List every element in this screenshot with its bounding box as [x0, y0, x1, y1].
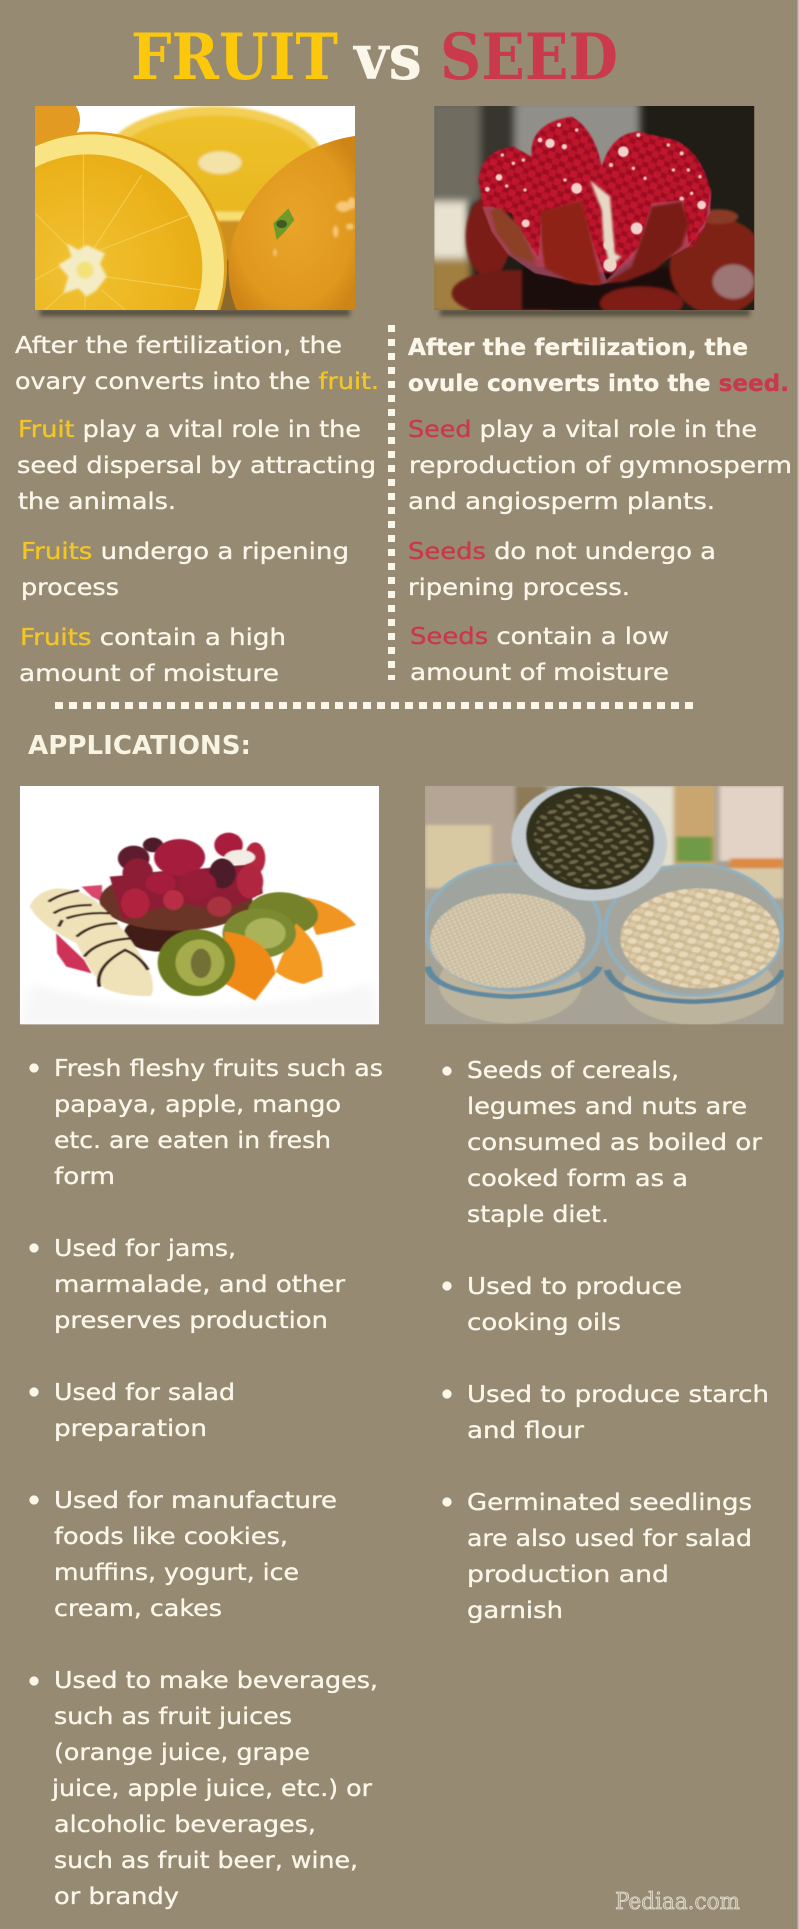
- title: vs: [352, 20, 422, 95]
- item: cooking oils: cooking oils: [467, 1308, 621, 1336]
- item: beverages: Used to make beverages,: [54, 1666, 378, 1694]
- fact: fruit formation: After the fertilization, the: [15, 331, 342, 359]
- fact: seed moisture: amount of moisture: [410, 658, 669, 686]
- item: beverages: [30, 1666, 378, 1910]
- tilted jar: [510, 786, 668, 902]
- item: fresh fruits: [30, 1054, 383, 1190]
- panel: fruit facts: [15, 331, 379, 687]
- item: cooking oils: [442, 1272, 682, 1336]
- item: salad: preparation: [54, 1414, 207, 1442]
- muffin: [123, 924, 188, 952]
- item: manufactured foods: foods like cookies,: [54, 1522, 288, 1550]
- item: staple diet: legumes and nuts are: [467, 1092, 747, 1120]
- berries: [118, 833, 265, 918]
- photo: pomegranate: [428, 100, 767, 320]
- item: manufactured foods: [30, 1486, 337, 1622]
- item: germinated seedlings: [442, 1488, 752, 1624]
- fact: seed role: [408, 415, 792, 515]
- list: seed applications: [442, 1056, 769, 1624]
- item: germinated seedlings: Germinated seedlings: [467, 1488, 752, 1516]
- list: fruit applications: [30, 1054, 383, 1910]
- fact: fruit role: the animals.: [18, 487, 176, 515]
- fact: fruit role: seed dispersal by attracting: [17, 451, 376, 479]
- item: salad: [30, 1378, 235, 1442]
- fact: seed role: and angiosperm plants.: [408, 487, 715, 515]
- heading: applications: APPLICATIONS:: [28, 731, 251, 761]
- title: [131, 20, 618, 95]
- item: starch and flour: and flour: [467, 1416, 584, 1444]
- item: salad: Used for salad: [54, 1378, 235, 1406]
- item: germinated seedlings: garnish: [467, 1596, 563, 1624]
- item: fresh fruits: Fresh fleshy fruits such as: [54, 1054, 383, 1082]
- photo: fruit dessert plate: [20, 786, 380, 1027]
- item: beverages: such as fruit beer, wine,: [54, 1846, 358, 1874]
- item: beverages: juice, apple juice, etc.) or: [51, 1774, 372, 1802]
- item: staple diet: Seeds of cereals,: [467, 1056, 679, 1084]
- fact: seed ripening: Seeds do not undergo a: [408, 537, 716, 565]
- item: germinated seedlings: production and: [467, 1560, 669, 1588]
- arils: [478, 117, 711, 273]
- banana: [30, 888, 153, 996]
- item: fresh fruits: form: [54, 1162, 115, 1190]
- fact: fruit ripening: process: [21, 573, 119, 601]
- rind: [482, 187, 711, 285]
- fact: fruit moisture: amount of moisture: [19, 659, 279, 687]
- item: cooking oils: Used to produce: [467, 1272, 682, 1300]
- item: staple diet: [442, 1056, 762, 1228]
- fact: seed formation: After the fertilization, the: [408, 333, 748, 361]
- item: manufactured foods: muffins, yogurt, ice: [54, 1558, 299, 1586]
- fact: seed ripening: [408, 537, 716, 601]
- fact: seed formation: [408, 333, 789, 397]
- item: jams: preserves production: [54, 1306, 328, 1334]
- item: staple diet: cooked form as a: [467, 1164, 688, 1192]
- fact: seed role: Seed play a vital role in the: [408, 415, 757, 443]
- bowls: [425, 863, 784, 1025]
- fact: seed ripening: ripening process.: [408, 573, 630, 601]
- item: jams: [30, 1234, 345, 1334]
- item: beverages: such as fruit juices: [54, 1702, 292, 1730]
- item: beverages: or brandy: [54, 1882, 179, 1910]
- item: fresh fruits: papaya, apple, mango: [54, 1090, 341, 1118]
- title: SEED: [440, 20, 618, 95]
- item: starch and flour: Used to produce starch: [467, 1380, 769, 1408]
- fact: fruit formation: [15, 331, 379, 395]
- fact: fruit ripening: Fruits undergo a ripening: [21, 537, 349, 565]
- item: germinated seedlings: are also used for salad: [467, 1524, 752, 1552]
- fact: fruit role: [17, 415, 376, 515]
- title: FRUIT: [131, 20, 338, 95]
- fact: seed formation: ovule converts into the seed.: [408, 369, 789, 397]
- fact: seed moisture: Seeds contain a low: [410, 622, 669, 650]
- kiwi and orange wedges: [158, 885, 356, 1001]
- item: beverages: (orange juice, grape: [54, 1738, 310, 1766]
- photo: cut oranges: [35, 106, 355, 318]
- item: staple diet: consumed as boiled or: [467, 1128, 762, 1156]
- item: manufactured foods: cream, cakes: [54, 1594, 222, 1622]
- item: beverages: alcoholic beverages,: [54, 1810, 316, 1838]
- item: manufactured foods: Used for manufacture: [54, 1486, 337, 1514]
- fact: fruit moisture: [19, 623, 286, 687]
- fact: fruit role: Fruit play a vital role in the: [18, 415, 361, 443]
- item: starch and flour: [442, 1380, 769, 1444]
- item: jams: marmalade, and other: [54, 1270, 345, 1298]
- fact: fruit formation: ovary converts into the fruit.: [15, 367, 379, 395]
- item: fresh fruits: etc. are eaten in fresh: [54, 1126, 331, 1154]
- item: jams: Used for jams,: [54, 1234, 236, 1262]
- panel: seed facts: [408, 333, 792, 686]
- credit: Pediaa.com: Pediaa.com: [615, 1889, 740, 1915]
- fact: fruit ripening: [21, 537, 349, 601]
- sauce: [56, 933, 92, 973]
- photo: grains in glass bowls: [425, 776, 784, 1025]
- fact: seed role: reproduction of gymnosperm: [409, 451, 792, 479]
- fact: seed moisture: [410, 622, 669, 686]
- fact: fruit moisture: Fruits contain a high: [20, 623, 286, 651]
- item: staple diet: staple diet.: [467, 1200, 609, 1228]
